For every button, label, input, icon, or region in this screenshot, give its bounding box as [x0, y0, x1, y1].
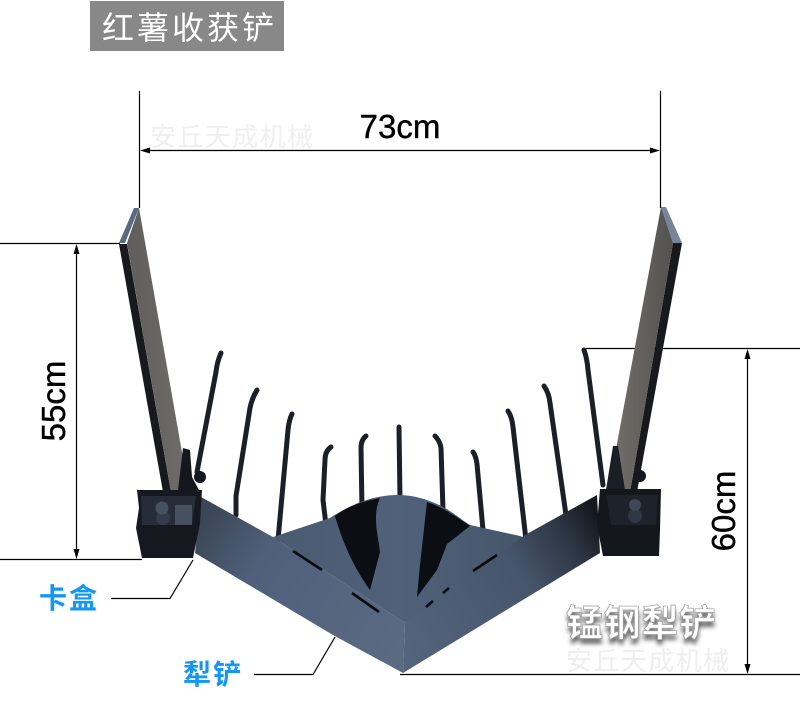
dimension: height 60cm — [400, 348, 800, 674]
watermark top: 安丘天成机械 — [150, 122, 313, 152]
callout: clamp box — [39, 560, 193, 614]
blade slots — [293, 551, 497, 612]
left clamp box — [136, 490, 202, 558]
callout: plough shovel: 犁铲 — [183, 659, 241, 690]
title banner: 红薯收获铲 — [102, 10, 274, 46]
callout: plough shovel — [183, 637, 335, 690]
manganese steel label: 锰钢犁铲 — [566, 603, 716, 644]
left post — [119, 208, 206, 492]
tines — [197, 350, 603, 540]
dimension: height 55cm: 55cm — [35, 361, 72, 441]
dimension: width 73cm: 73cm — [360, 108, 440, 145]
watermark bottom: 安丘天成机械 — [566, 646, 729, 676]
manganese steel label: 锰钢犁铲 — [566, 608, 716, 649]
right post — [606, 207, 682, 492]
plough beam left — [195, 497, 405, 673]
title banner — [90, 1, 284, 51]
dimension: height 55cm — [0, 244, 142, 560]
dimension: height 60cm: 60cm — [705, 471, 742, 551]
dimension: width 73cm — [140, 91, 660, 208]
plough beam right — [403, 495, 600, 673]
callout: clamp box: 卡盒 — [39, 583, 97, 614]
right clamp box — [597, 489, 661, 556]
plough blade — [273, 495, 530, 623]
